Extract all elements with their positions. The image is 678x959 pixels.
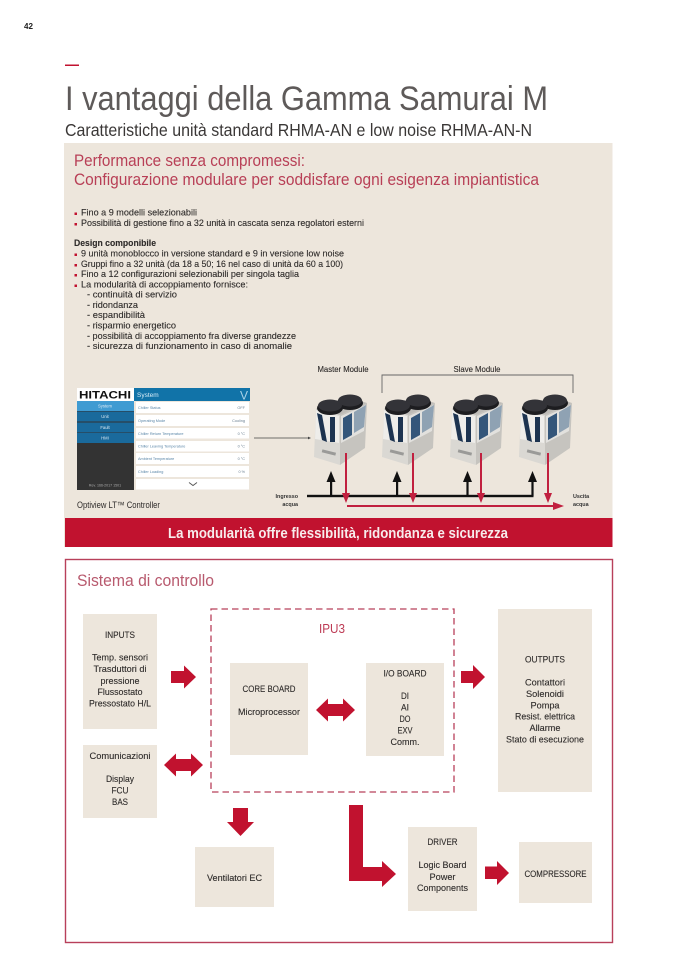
- box: inputs: Temp. sensori: [92, 652, 148, 664]
- controller screen: [77, 388, 250, 490]
- unit: slave module 1: [382, 394, 435, 465]
- box: inputs: Trasduttori di: [94, 664, 146, 675]
- feature list: Possibilità di gestione fino a 32 unità in cascata senza regolatori esterni: [81, 218, 364, 229]
- arrow: core board and I/O board: [316, 698, 355, 722]
- feature list: 9 unità monoblocco in versione standard e 9 in versione low noise: [81, 248, 344, 260]
- controller screen: HITACHI: [79, 390, 131, 402]
- box: I/O board: [366, 663, 444, 756]
- box: I/O board: I/O BOARD: [384, 668, 427, 680]
- controller screen: Operating Mode: [138, 419, 165, 423]
- controller screen: V: [240, 388, 248, 402]
- box: driver: Components: [417, 883, 468, 894]
- label: slave module: Slave Module: [454, 364, 501, 374]
- label: water outlet: acqua: [573, 502, 590, 508]
- panel heading: [74, 152, 540, 189]
- controller screen: Chiller Status: [138, 406, 161, 410]
- IPU3 label: IPU3: [319, 622, 345, 636]
- box: communications: BAS: [112, 797, 128, 808]
- page number: 42: [24, 22, 34, 31]
- box: outputs: Contattori: [525, 678, 565, 688]
- controller screen: Chiller Return Temperature: [138, 432, 184, 436]
- feature list: Fino a 12 configurazioni selezionabili per singola taglia: [81, 269, 300, 280]
- controller screen: Chiller Leaving Temperature: [138, 444, 185, 448]
- label: water inlet: [276, 494, 299, 508]
- unit: slave module 3: [519, 394, 572, 465]
- slave bracket: [382, 375, 573, 393]
- box: core board: CORE BOARD: [242, 684, 296, 695]
- box: inputs: INPUTS: [105, 630, 135, 641]
- controller screen: 0 °C: [238, 457, 245, 461]
- water outlet pipework: [342, 453, 564, 510]
- box: communications: FCU: [112, 786, 129, 796]
- subtitle: Caratteristiche unità standard RHMA-AN e low noise RHMA-AN-N: [65, 120, 532, 140]
- arrow: IPU3 to EC fans: [227, 808, 254, 836]
- label: water outlet: Uscita: [573, 494, 590, 500]
- feature list: Design componibile: [74, 238, 156, 249]
- box: I/O board: EXV: [398, 726, 413, 736]
- arrow: inputs to IPU3: [171, 666, 196, 688]
- label: water inlet: acqua: [282, 502, 299, 508]
- title: I vantaggi della Gamma Samurai M: [65, 80, 548, 118]
- box: driver: DRIVER: [428, 837, 458, 848]
- box: outputs: Stato di esecuzione: [506, 734, 584, 746]
- unit: master module: [314, 394, 367, 465]
- feature list: - continuità di servizio: [87, 290, 177, 300]
- label: master module: Master Module: [318, 364, 369, 374]
- controller screen: System: [137, 392, 159, 399]
- controller screen: Cooling: [232, 419, 245, 423]
- controller screen: Ambient Temperature: [138, 457, 174, 461]
- arrow: communications and IPU3: [164, 754, 203, 776]
- feature list: - risparmio energetico: [87, 320, 176, 332]
- box: core board: [230, 663, 308, 755]
- feature list: - possibilità di accoppiamento fra diverse grandezze: [87, 331, 296, 342]
- box: I/O board: AI: [401, 702, 409, 714]
- box: outputs: Solenoidi: [526, 689, 564, 700]
- controller caption: Optiview LT™ Controller: [77, 500, 160, 510]
- label: water outlet: [573, 494, 590, 508]
- panel: control system: [66, 560, 612, 942]
- box: driver: Logic Board: [418, 860, 466, 871]
- label: water inlet: Ingresso: [276, 494, 299, 500]
- controller screen: 0 °C: [238, 444, 245, 448]
- feature list: - sicurezza di funzionamento in caso di anomalie: [87, 341, 292, 352]
- box: inputs: [83, 614, 157, 729]
- box: core board: Microprocessor: [238, 707, 301, 718]
- box: compressor: COMPRESSORE: [524, 869, 586, 880]
- box: driver: [408, 827, 477, 911]
- arrow: driver to compressor: [485, 861, 509, 885]
- feature list: La modularità di accoppiamento fornisce:: [81, 280, 248, 290]
- connector: controller to master: [254, 437, 311, 439]
- controller screen: Fault: [100, 425, 110, 430]
- controller screen: OFF: [237, 406, 246, 410]
- controller screen: System: [98, 404, 112, 408]
- feature list: Fino a 9 modelli selezionabili: [81, 208, 197, 218]
- box: outputs: Pompa: [530, 700, 560, 712]
- arrow: IPU3 to driver: [349, 805, 396, 887]
- feature list: - espandibilità: [87, 310, 146, 321]
- feature list: - ridondanza: [87, 300, 139, 311]
- box: EC fans: [195, 847, 274, 907]
- IPU3 dashed frame: [211, 609, 454, 792]
- box: outputs: Resist. elettrica: [515, 712, 576, 722]
- controller screen: 0 %: [238, 470, 246, 474]
- box: communications: [83, 745, 157, 818]
- box: I/O board: Comm.: [390, 737, 420, 748]
- box: I/O board: DO: [400, 714, 410, 725]
- box: inputs: Pressostato H/L: [89, 698, 152, 710]
- accent dash: [65, 64, 79, 66]
- controller screen: HMI: [101, 436, 109, 440]
- box: inputs: pressione: [100, 676, 140, 687]
- box: compressor: [519, 842, 592, 903]
- panel heading: Configurazione modulare per soddisfare ogni esigenza impiantistica: [74, 171, 540, 189]
- controller screen: Rev. 166-2017 1501: [89, 484, 121, 488]
- arrow: IPU3 to outputs: [461, 665, 485, 689]
- controller screen: Chiller Loading: [138, 470, 163, 474]
- box: outputs: Allarme: [530, 723, 560, 734]
- box: I/O board: DI: [401, 691, 409, 702]
- controller screen: 0 °C: [238, 432, 245, 436]
- feature list: [74, 208, 364, 352]
- banner: La modularità offre flessibilità, ridondanza e sicurezza: [168, 526, 509, 542]
- box: inputs: Flussostato: [98, 687, 142, 698]
- box: communications: Comunicazioni: [90, 751, 150, 762]
- box: outputs: [498, 609, 592, 792]
- box: EC fans: Ventilatori EC: [207, 873, 262, 884]
- panel: performance: [64, 143, 612, 547]
- feature list: Gruppi fino a 32 unità (da 18 a 50; 16 nel caso di unità da 60 a 100): [81, 259, 343, 270]
- panel heading: Performance senza compromessi:: [74, 152, 305, 170]
- water inlet pipework: [307, 471, 537, 497]
- box: driver: Power: [430, 872, 456, 883]
- unit: slave module 2: [450, 394, 503, 465]
- banner: [65, 518, 612, 547]
- panel heading: Sistema di controllo: [77, 572, 214, 590]
- controller screen: Unit: [101, 414, 110, 419]
- box: communications: Display: [106, 774, 134, 785]
- box: outputs: OUTPUTS: [525, 654, 565, 666]
